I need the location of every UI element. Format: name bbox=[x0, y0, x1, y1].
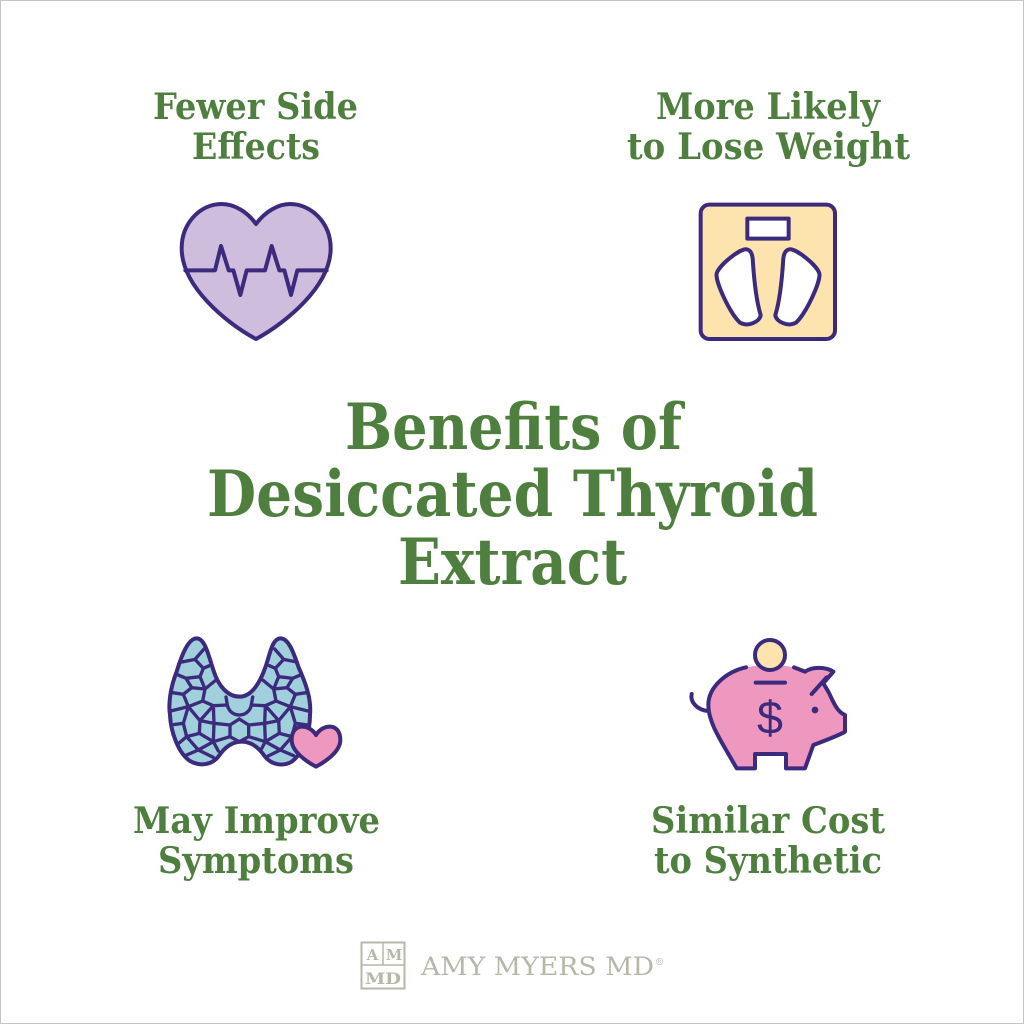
heading: more likely to lose weight bbox=[627, 86, 910, 168]
heading: may improve symptoms: Symptoms bbox=[158, 840, 354, 882]
logo mark: A bbox=[366, 946, 379, 964]
heading: more likely to lose weight: to Lose Weight bbox=[627, 126, 910, 168]
logo mark: MD bbox=[365, 969, 401, 988]
logo mark: M bbox=[386, 946, 402, 964]
logo mark bbox=[362, 942, 404, 988]
heading: may improve symptoms: May Improve bbox=[133, 800, 380, 842]
title bbox=[207, 390, 818, 600]
heading: fewer side effects: Fewer Side bbox=[153, 86, 358, 128]
heading: may improve symptoms bbox=[133, 800, 380, 882]
icon: piggy bank with coin bbox=[691, 640, 845, 768]
heading: similar cost to synthetic: to Synthetic bbox=[654, 840, 882, 882]
heading: similar cost to synthetic bbox=[651, 800, 885, 882]
title: Extract bbox=[398, 525, 627, 600]
heading: fewer side effects bbox=[153, 86, 358, 168]
heading: more likely to lose weight: More Likely bbox=[656, 86, 881, 128]
icon: bathroom scale bbox=[701, 205, 835, 339]
icon: heart with heartbeat bbox=[182, 204, 331, 339]
icon: piggy bank with coin: $ bbox=[757, 692, 783, 744]
heading: fewer side effects: Effects bbox=[192, 126, 320, 168]
logo wordmark: AMY MYERS MD bbox=[420, 952, 654, 981]
registered mark: ® bbox=[655, 958, 664, 968]
logo: amy myers md bbox=[362, 942, 664, 988]
title: Benefits of bbox=[345, 390, 685, 465]
icon: thyroid with heart bbox=[169, 638, 340, 767]
title: Desiccated Thyroid bbox=[207, 457, 818, 532]
heading: similar cost to synthetic: Similar Cost bbox=[651, 800, 885, 842]
